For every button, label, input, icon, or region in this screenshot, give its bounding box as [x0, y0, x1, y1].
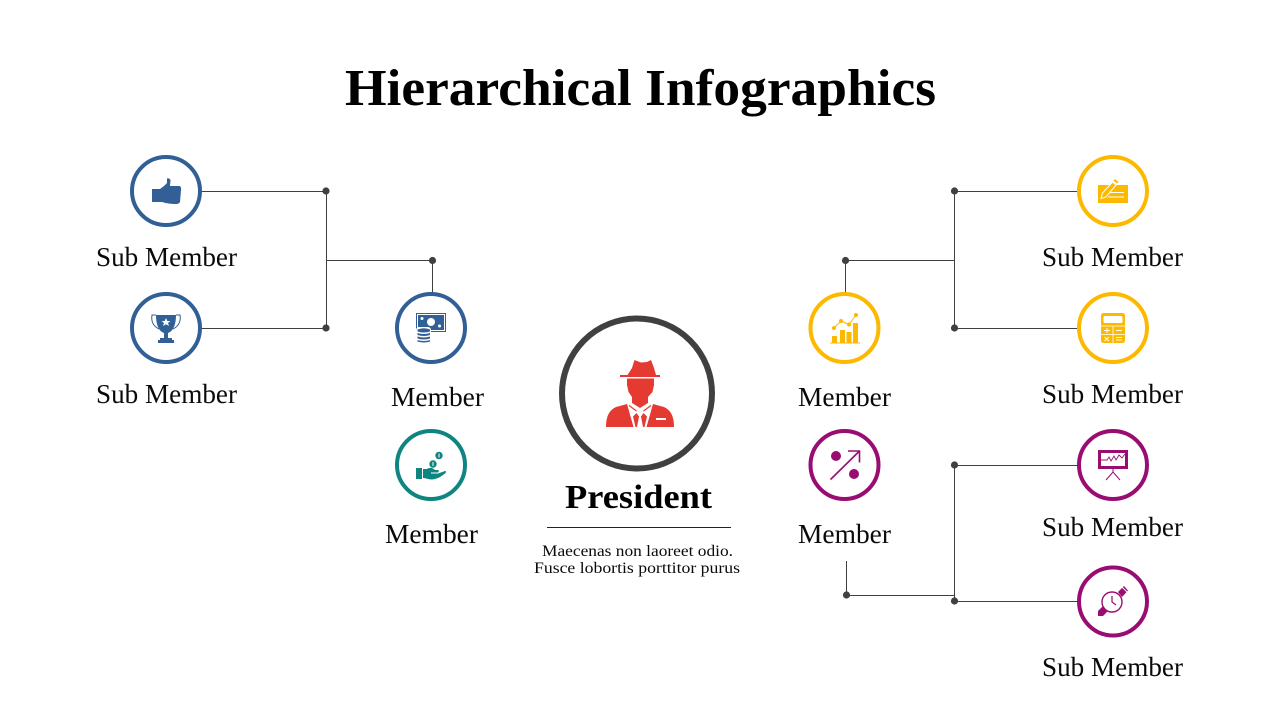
description: Maecenas non laoreet odio. — [542, 543, 733, 560]
icon: presentation board — [1100, 452, 1126, 480]
label: Member — [391, 382, 484, 412]
title: Hierarchical Infographics — [345, 60, 936, 117]
icon: trophy — [152, 315, 180, 343]
label: Sub Member — [96, 242, 237, 272]
icon: thumbs up — [152, 178, 181, 204]
panel: president — [534, 318, 740, 577]
connector: right yellow branch — [842, 187, 1078, 332]
node: sub member trophy — [96, 294, 237, 409]
icon: growth chart — [830, 313, 860, 344]
icon: cheque with pen — [1098, 179, 1128, 203]
icon: calculator — [1101, 313, 1125, 343]
description — [534, 543, 740, 577]
label: Member — [798, 519, 891, 549]
label: Sub Member — [96, 379, 237, 409]
label: Member — [798, 382, 891, 412]
heading: President — [565, 479, 713, 516]
node: member hand with coins — [385, 431, 478, 549]
node: member chart — [798, 294, 891, 412]
label: Member — [385, 519, 478, 549]
label: Sub Member — [1042, 652, 1183, 682]
node: sub member thumbs up — [96, 157, 237, 272]
node: member percent arrow — [798, 431, 891, 549]
connector: right purple branch — [843, 461, 1078, 605]
icon: percent arrow — [830, 451, 860, 480]
description: Fusce lobortis porttitor purus — [534, 560, 740, 577]
icon: wrist watch — [1098, 586, 1128, 616]
label: Sub Member — [1042, 512, 1183, 542]
president ring — [562, 318, 712, 468]
node: member money — [391, 294, 484, 412]
node: sub member cheque — [1042, 157, 1183, 272]
divider — [547, 527, 731, 528]
connector: left blue branch — [202, 187, 436, 332]
node: sub member watch — [1042, 568, 1183, 682]
node: sub member presentation — [1042, 431, 1183, 542]
label: Sub Member — [1042, 242, 1183, 272]
icon: banknote and coins — [416, 314, 446, 344]
icon: person with hat — [606, 360, 674, 427]
label: Sub Member — [1042, 379, 1183, 409]
node: sub member calculator — [1042, 294, 1183, 409]
icon: hand with coins — [416, 452, 446, 480]
